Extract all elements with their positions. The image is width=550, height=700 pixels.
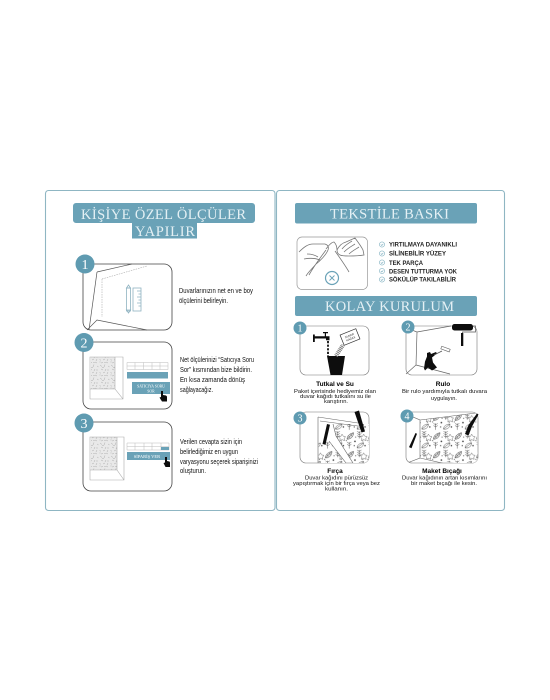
infographic content <box>46 190 504 510</box>
text: step 2: sağlayacağız. <box>180 385 213 394</box>
icon: paint roller <box>452 324 476 346</box>
icon: roller and ruler <box>126 285 141 313</box>
caption: brush: kullanın. <box>325 486 349 492</box>
icon: brushes <box>354 410 365 432</box>
number badge 2 <box>74 333 94 352</box>
caption: glue and water: Tutkal ve Su <box>316 381 354 388</box>
number badge: 2 <box>406 322 410 334</box>
icon: check marks <box>379 242 385 282</box>
button: ask seller: SATICIYA SORU <box>137 384 165 388</box>
text: step 3: oluşturun. <box>180 466 206 475</box>
feature list: YIRTILMAYA DAYANIKLI <box>389 242 457 248</box>
caption: brush: Fırça <box>327 468 343 475</box>
caption: glue and water: karıştırın. <box>324 399 348 405</box>
illustration: room with measuring tools <box>83 264 172 330</box>
text: step 2: Sor” kısmından bize bildirin. <box>180 365 252 374</box>
panel: custom measurements <box>46 190 275 510</box>
panel: textile print and easy installation <box>276 190 504 510</box>
icon: cross badge <box>326 272 338 284</box>
text: step 1: Duvarlarınızın net en ve boy <box>179 286 253 295</box>
button: place order: SİPARİŞ VER <box>134 454 160 459</box>
heading: easy installation <box>295 296 477 316</box>
step 2 <box>74 333 254 409</box>
feature list: SİLİNEBİLİR YÜZEY <box>389 250 446 258</box>
caption: glue and water: Paket içerisinde hediyemiz olan <box>294 389 376 395</box>
caption: roller: uygulayın. <box>431 396 457 402</box>
text: step 2: Net ölçülerinizi “Satıcıya Soru <box>180 355 254 364</box>
step 1 <box>76 254 253 330</box>
number badge 3: 3 <box>80 417 88 432</box>
illustration: faucet, packet and cup: KAĞIDI <box>345 334 356 342</box>
icon: silhouette <box>424 352 437 370</box>
text: step 1: ölçülerini belirleyin. <box>179 296 228 305</box>
heading: textile print <box>295 203 477 224</box>
number badge 3 <box>74 414 94 432</box>
caption: utility knife <box>402 468 487 487</box>
install step 3: brush <box>293 410 380 492</box>
illustration: ask seller screen <box>83 342 172 409</box>
illustration: person rolling wall <box>404 324 477 375</box>
button: ask seller: SOR <box>147 390 155 394</box>
feature list: DESEN TUTTURMA YOK <box>389 270 458 276</box>
caption: utility knife: Maket Bıçağı <box>422 468 462 475</box>
button: ask seller <box>132 382 170 394</box>
text: step 1 <box>179 286 253 305</box>
icon: hand cursor <box>160 391 167 402</box>
caption: roller: Bir rulo yardımıyla tutkalı duvara <box>402 389 488 395</box>
icon: knives <box>465 414 478 436</box>
number badge 1 <box>76 254 94 274</box>
number badge 1: 1 <box>82 258 88 273</box>
number badge: 1 <box>298 324 302 334</box>
number badge: 3 <box>298 414 302 424</box>
illustration: hands tearing fabric <box>297 237 368 290</box>
heading: custom measurements <box>73 203 255 240</box>
illustration: faucet, packet and cup: DUVAR <box>344 332 355 339</box>
install step 1: glue and water <box>294 322 376 405</box>
heading: easy installation: KOLAY KURULUM <box>325 299 454 315</box>
feature list: TEK PARÇA <box>389 261 424 267</box>
text: step 3: Verilen cevapta sizin için <box>180 437 242 446</box>
heading: custom measurements: YAPILIR <box>135 224 195 240</box>
heading: textile print: TEKSTİLE BASKI <box>330 206 449 222</box>
text: step 3: belirlediğimiz en uygun <box>180 447 238 456</box>
caption: brush: Duvar kağıdını pürüzsüz <box>305 476 368 482</box>
caption: roller <box>402 381 488 402</box>
caption: roller: Rulo <box>436 381 450 388</box>
feature list <box>379 242 458 284</box>
caption: brush <box>293 468 380 492</box>
install step 2: roller <box>402 320 488 402</box>
number badge: 4 <box>404 412 410 422</box>
feature list: SÖKÜLÜP TAKILABİLİR <box>389 276 457 284</box>
install step 4: utility knife <box>400 410 487 487</box>
caption: utility knife: Duvar kağıdının artan kısımlarını <box>402 476 487 482</box>
caption: utility knife: bir maket bıçağı ile kesin. <box>411 481 477 487</box>
text: step 3 <box>180 437 258 475</box>
number badge 2: 2 <box>80 336 88 352</box>
caption: glue and water <box>294 381 376 405</box>
illustration: faucet, packet and cup <box>300 326 369 375</box>
illustration: trimming patterned wallpaper <box>406 412 478 466</box>
caption: glue and water: duvar kağıdı tutkalını su ile <box>300 394 371 400</box>
text: step 2 <box>180 355 254 394</box>
caption: brush: yapıştırmak için bir fırça veya bez <box>293 481 380 487</box>
text: step 3: varyasyonu seçerek siparişinizi <box>180 457 258 466</box>
heading: custom measurements: KİŞİYE ÖZEL ÖLÇÜLER <box>81 206 246 223</box>
illustration: brushing patterned wallpaper <box>300 410 369 463</box>
text: step 2: En kısa zamanda dönüş <box>180 375 245 384</box>
step 3 <box>74 414 258 491</box>
illustration: order screen <box>83 422 172 491</box>
icon: hand cursor <box>164 457 170 467</box>
